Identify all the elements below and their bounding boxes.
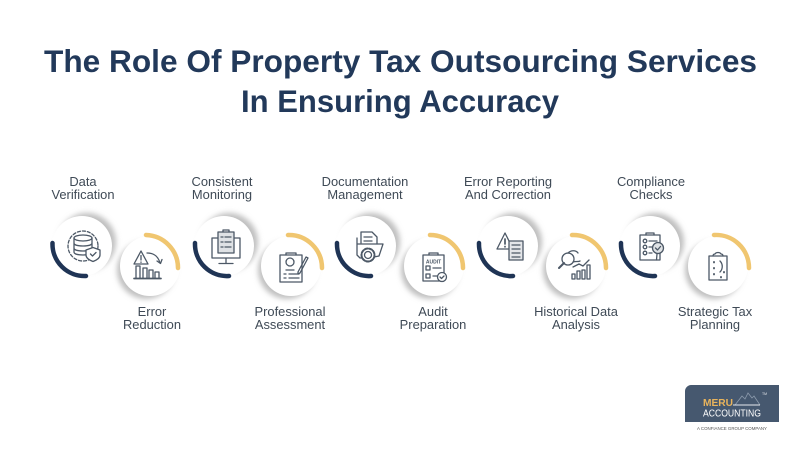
step 8: Historical Data Analysis	[534, 235, 619, 332]
title: The Role Of Property Tax Outsourcing Services	[44, 43, 757, 79]
logo: Meru Accounting: ACCOUNTING	[703, 408, 761, 420]
icon: clipboard person	[280, 253, 308, 282]
step 1: Data Verification: Data	[69, 174, 97, 189]
step 3: Consistent Monitoring	[192, 174, 258, 276]
step 10: Strategic Tax Planning	[678, 235, 753, 332]
icon: checklist with magnifier	[640, 233, 664, 260]
step 1: Data Verification	[51, 174, 116, 276]
step 8: Historical Data Analysis: Analysis	[552, 317, 600, 332]
step 10: Strategic Tax Planning: Strategic Tax	[678, 304, 753, 319]
step 2: Error Reduction: Reduction	[123, 317, 181, 332]
icon: magnifier and chart	[559, 251, 590, 279]
step 8: Historical Data Analysis: Historical Data	[534, 304, 619, 319]
icon: audit clipboard: AUDIT	[426, 260, 441, 266]
step 7: Error Reporting And Correction: Error Reporting	[464, 174, 552, 189]
logo: Meru Accounting: TM	[762, 392, 767, 396]
title: In Ensuring Accuracy	[241, 83, 559, 119]
step 5: Documentation Management	[322, 174, 408, 276]
icon: warning and falling bars	[134, 251, 162, 278]
icon: folder and gear	[357, 232, 383, 262]
step 6: Audit Preparation	[400, 235, 466, 332]
logo: Meru Accounting: A CONFIANCE GROUP COMPANY	[697, 426, 767, 431]
icon: strategy clipboard	[709, 252, 727, 280]
step 6: Audit Preparation: Preparation	[400, 317, 466, 332]
step 7: Error Reporting And Correction: And Correction	[465, 187, 551, 202]
step 7: Error Reporting And Correction	[464, 174, 552, 276]
logo: Meru Accounting	[685, 385, 779, 431]
step 9: Compliance Checks	[617, 174, 685, 276]
step 10: Strategic Tax Planning: Planning	[690, 317, 740, 332]
step 1: Data Verification: Verification	[51, 187, 115, 202]
step 9: Compliance Checks: Checks	[630, 187, 672, 202]
icon: monitor checklist	[212, 230, 240, 264]
step 4: Professional Assessment: Assessment	[255, 317, 326, 332]
step 5: Documentation Management: Management	[327, 187, 403, 202]
step 2: Error Reduction: Error	[138, 304, 167, 319]
step 5: Documentation Management: Documentation	[322, 174, 408, 189]
step 4: Professional Assessment	[255, 235, 326, 332]
step 6: Audit Preparation: Audit	[418, 304, 448, 319]
title	[44, 43, 757, 119]
step 9: Compliance Checks: Compliance	[617, 174, 685, 189]
icon: database shield	[68, 231, 100, 262]
icon: warning and report	[497, 233, 523, 260]
step 2: Error Reduction	[117, 235, 181, 332]
step 3: Consistent Monitoring: Monitoring	[192, 187, 252, 202]
logo: Meru Accounting: MERU	[703, 397, 733, 409]
step 3: Consistent Monitoring: Consistent	[192, 174, 253, 189]
step 4: Professional Assessment: Professional	[255, 304, 325, 319]
